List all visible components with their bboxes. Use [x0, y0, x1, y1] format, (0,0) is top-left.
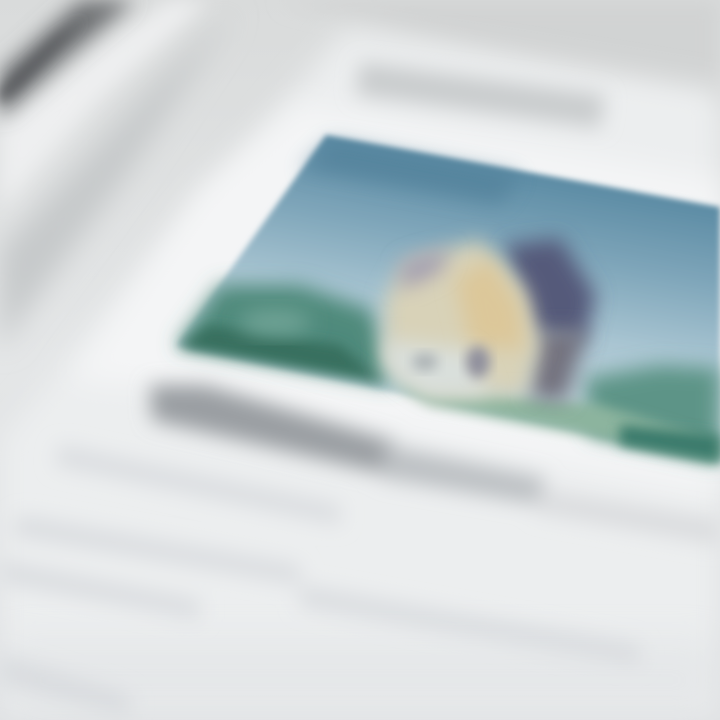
- lower white wall: [385, 340, 490, 398]
- door shade: [466, 346, 490, 378]
- front wall: [385, 240, 540, 395]
- left hill dark edge: [178, 325, 385, 382]
- soft bottom shade: [0, 640, 720, 720]
- bold headline smudge: [150, 385, 720, 545]
- right dark ground: [620, 425, 720, 462]
- desk area top right: [280, 0, 720, 110]
- warm wall highlight: [455, 258, 525, 350]
- header text smudge: [356, 62, 605, 128]
- left hill: [176, 285, 395, 385]
- house: [385, 238, 596, 402]
- picture panel: [176, 135, 720, 462]
- pale green patch: [239, 309, 311, 335]
- pen core: [0, 18, 85, 105]
- ground band: [390, 382, 720, 462]
- left band shadow: [0, 10, 235, 350]
- bright margin around image: [70, 105, 720, 495]
- dark top sky edge: [300, 140, 520, 205]
- sky: [176, 135, 720, 462]
- left roof shade: [400, 248, 450, 290]
- dark roof side: [505, 238, 596, 340]
- pen: dark stroke top left: [0, 0, 135, 118]
- top left pale stripe: [0, 0, 210, 210]
- window shade: [412, 353, 438, 371]
- body text lines: [0, 445, 640, 718]
- lower dark wall: [528, 330, 588, 402]
- right hill: [585, 365, 720, 462]
